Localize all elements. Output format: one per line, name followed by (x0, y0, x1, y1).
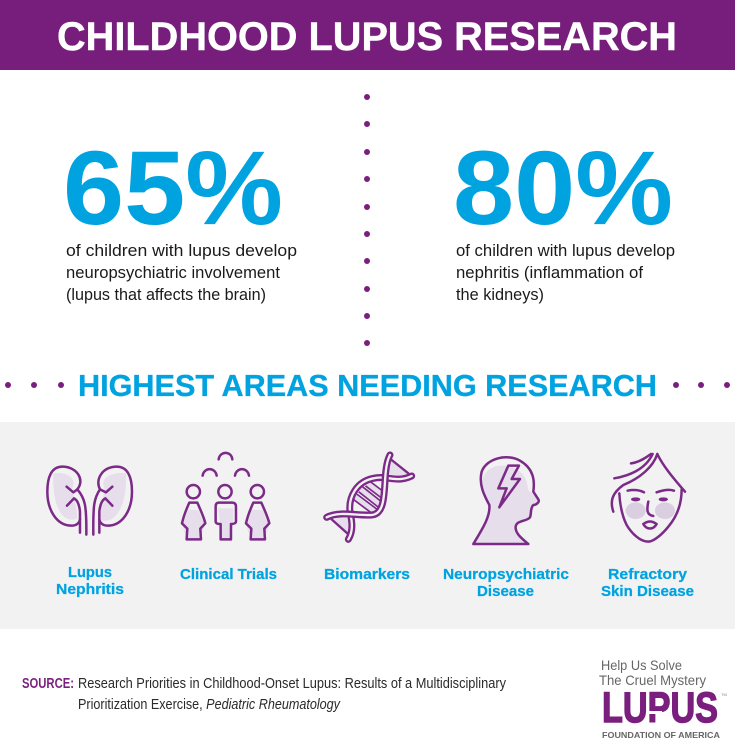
source citation: Prioritization Exercise, Pediatric Rheumatology (78, 697, 341, 713)
label: Neuropsychiatric Disease: Disease (477, 583, 534, 600)
icon: face with rash (611, 454, 685, 542)
label: Biomarkers: Biomarkers (324, 566, 410, 583)
source citation (22, 676, 507, 713)
stat: 65 percent: of children with lupus develop (66, 241, 297, 260)
label: Neuropsychiatric Disease: Neuropsychiatric (443, 566, 569, 583)
section heading with dots: HIGHEST AREAS NEEDING RESEARCH (78, 368, 657, 403)
panel: research areas background (0, 422, 735, 629)
source citation: SOURCE: (22, 676, 74, 692)
stat: 65 percent: neuropsychiatric involvement (66, 263, 280, 282)
logo: Lupus Foundation of America (599, 657, 727, 740)
logo: Lupus Foundation of America: The Cruel Mystery (599, 672, 706, 688)
stat: 80 percent: of children with lupus develop (456, 241, 675, 260)
stat: 80 percent: the kidneys) (456, 285, 544, 304)
icon: DNA helix (327, 455, 412, 539)
stat: 65 percent: (lupus that affects the brain) (66, 285, 266, 304)
stat: 80 percent: 80% (453, 130, 673, 247)
logo: Lupus Foundation of America: Help Us Solve (601, 657, 682, 673)
stat: 80 percent (453, 130, 675, 304)
label: Refractory Skin Disease: Skin Disease (601, 583, 694, 600)
label: Clinical Trials: Clinical Trials (180, 566, 277, 583)
icon: head with lightning bolt (473, 457, 539, 544)
label: Lupus Nephritis: Lupus (68, 564, 112, 581)
label: Neuropsychiatric Disease (443, 566, 569, 600)
stat: 80 percent: nephritis (inflammation of (456, 263, 643, 282)
stat: 65 percent: 65% (63, 130, 283, 247)
title banner (0, 0, 735, 70)
logo: Lupus Foundation of America: TM (721, 692, 727, 697)
vertical dotted divider (364, 94, 370, 346)
icon: clinical trial participants (182, 453, 269, 539)
stat: 65 percent (63, 130, 297, 304)
label: Refractory Skin Disease: Refractory (608, 566, 688, 583)
label: Lupus Nephritis: Nephritis (56, 581, 124, 598)
label: Lupus Nephritis (56, 564, 124, 598)
icon: kidneys (47, 467, 132, 535)
label: Refractory Skin Disease (601, 566, 694, 600)
logo: Lupus Foundation of America: FOUNDATION OF AMERICA (602, 730, 720, 740)
source citation: Research Priorities in Childhood-Onset Lupus: Results of a Multidisciplinary (78, 676, 507, 692)
title banner: CHILDHOOD LUPUS RESEARCH (57, 15, 677, 59)
